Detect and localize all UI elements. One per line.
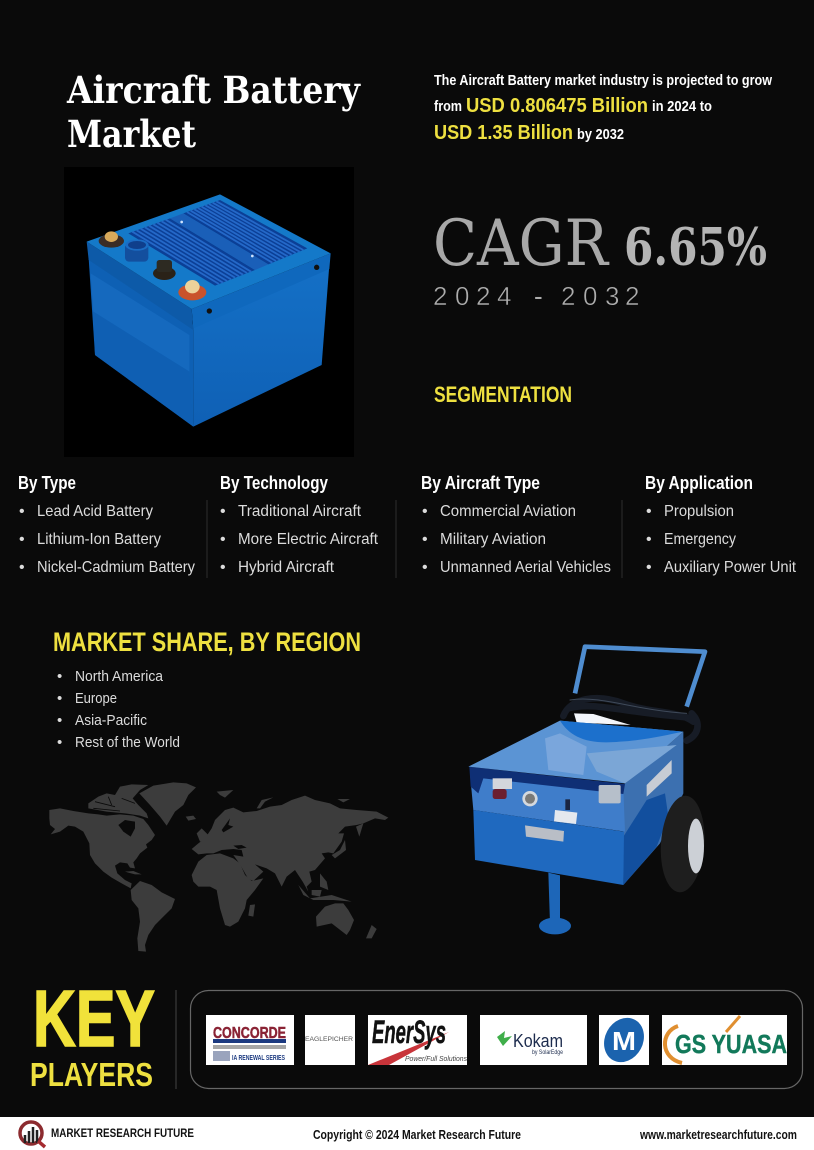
segment: by application: Emergency bbox=[664, 531, 736, 548]
CAGR figure: CAGR bbox=[433, 207, 610, 281]
segment: by aircraft type: Military Aviation bbox=[440, 531, 546, 548]
CAGR figure: - bbox=[534, 281, 543, 311]
footer bbox=[0, 1117, 814, 1150]
segment: by type: Lithium-Ion Battery bbox=[37, 531, 161, 548]
region list: • bbox=[57, 712, 62, 729]
CAGR figure: 2024 bbox=[433, 281, 511, 311]
cart stand bbox=[539, 873, 571, 934]
key players heading: PLAYERS bbox=[30, 1056, 153, 1093]
image: aircraft battery bbox=[64, 167, 354, 457]
market projection text: by 2032 bbox=[577, 126, 624, 143]
logo: m mark: M bbox=[612, 1026, 636, 1056]
region list: Asia-Pacific bbox=[75, 712, 147, 729]
segment: by aircraft type: • bbox=[422, 531, 428, 548]
cart right side bbox=[623, 732, 683, 885]
logo: concorde: CONCORDE bbox=[213, 1025, 286, 1042]
region list: • bbox=[57, 668, 62, 685]
map: europe, asia, africa, oceania bbox=[192, 790, 388, 938]
logo: gs yuasa bbox=[662, 1015, 787, 1065]
segment: by technology: Hybrid Aircraft bbox=[238, 559, 335, 576]
world map bbox=[49, 782, 388, 952]
logo: kokam: Kokam bbox=[513, 1031, 563, 1051]
logo: eaglepicher: EAGLEPICHER bbox=[305, 1037, 354, 1043]
segment: by technology: Traditional Aircraft bbox=[238, 503, 362, 520]
segment: by aircraft type: By Aircraft Type bbox=[421, 473, 540, 493]
key players frame bbox=[190, 990, 802, 1088]
market share heading: MARKET SHARE, BY REGION bbox=[53, 627, 361, 657]
cart handle bbox=[575, 647, 705, 707]
title: Market bbox=[67, 112, 196, 156]
battery right face bbox=[193, 265, 329, 427]
market projection text: from bbox=[434, 98, 462, 115]
logo: enersys: EnerSys bbox=[372, 1014, 446, 1050]
segment: by type: By Type bbox=[18, 473, 76, 493]
CAGR figure bbox=[433, 207, 767, 311]
logo: eaglepicher bbox=[305, 1015, 355, 1065]
CAGR figure: 6.65% bbox=[624, 218, 767, 278]
footer: MARKET RESEARCH FUTURE bbox=[51, 1126, 194, 1140]
logo: concorde bbox=[206, 1015, 294, 1065]
battery left face bbox=[89, 258, 193, 427]
segment: by application: Auxiliary Power Unit bbox=[664, 559, 797, 576]
segment: by technology: • bbox=[220, 531, 226, 548]
segment: by technology: More Electric Aircraft bbox=[238, 531, 379, 548]
segment: by application bbox=[645, 473, 797, 576]
cart front bbox=[470, 773, 625, 832]
region list: North America bbox=[75, 668, 164, 685]
logo: m mark bbox=[596, 1011, 652, 1069]
title bbox=[66, 68, 361, 156]
segment: by application: By Application bbox=[645, 473, 753, 493]
title: Aircraft Battery bbox=[66, 68, 361, 112]
footer: Copyright © 2024 Market Research Future bbox=[313, 1128, 521, 1142]
segment: by technology bbox=[220, 473, 379, 576]
logo: enersys: Power/Full Solutions bbox=[405, 1056, 467, 1063]
logo: kokam: by SolarEdge bbox=[532, 1050, 564, 1056]
segmentation heading: SEGMENTATION bbox=[434, 382, 572, 407]
cart cables bbox=[563, 698, 698, 741]
segment: by technology: • bbox=[220, 559, 226, 576]
region list: Europe bbox=[75, 690, 117, 707]
battery terminals bbox=[99, 234, 124, 248]
market projection text: in 2024 to bbox=[652, 98, 712, 115]
logo: enersys bbox=[368, 1014, 467, 1065]
segment: by type: Lead Acid Battery bbox=[37, 503, 153, 520]
region list: • bbox=[57, 690, 62, 707]
segment: by type: • bbox=[19, 559, 25, 576]
segment: by aircraft type: Commercial Aviation bbox=[440, 503, 576, 520]
segment: by aircraft type: • bbox=[422, 503, 428, 520]
segment: by type: • bbox=[19, 531, 25, 548]
segment: by type: • bbox=[19, 503, 25, 520]
cart wheel bbox=[658, 794, 708, 894]
battery lid lip bbox=[87, 242, 193, 330]
segment: by application: • bbox=[646, 503, 652, 520]
key players heading bbox=[30, 974, 155, 1093]
logo: concorde: IA RENEWAL SERIES bbox=[232, 1055, 285, 1062]
market projection text bbox=[434, 72, 772, 144]
region list: • bbox=[57, 734, 62, 751]
key players heading: KEY bbox=[33, 974, 155, 1063]
segment: by type: Nickel-Cadmium Battery bbox=[37, 559, 195, 576]
segment: by application: • bbox=[646, 559, 652, 576]
logo: kokam bbox=[480, 1015, 587, 1065]
segment: by application: • bbox=[646, 531, 652, 548]
segment: by aircraft type bbox=[421, 473, 611, 576]
cart lid bbox=[468, 721, 683, 783]
market projection text: USD 0.806475 Billion bbox=[466, 95, 648, 117]
cart controls bbox=[493, 778, 512, 789]
image: ground power cart bbox=[468, 647, 708, 934]
logo: gs yuasa: GS YUASA bbox=[675, 1029, 787, 1059]
battery top bbox=[87, 194, 331, 309]
footer logo icon bbox=[20, 1122, 45, 1147]
market projection text: USD 1.35 Billion bbox=[434, 122, 573, 144]
segment: by type bbox=[18, 473, 195, 576]
cart cable highlight bbox=[574, 713, 631, 725]
region list: Rest of the World bbox=[75, 734, 180, 751]
segment: by aircraft type: Unmanned Aerial Vehicles bbox=[440, 559, 611, 576]
segment: by application: Propulsion bbox=[664, 503, 734, 520]
CAGR figure: 2032 bbox=[561, 281, 639, 311]
segment: by technology: By Technology bbox=[220, 473, 328, 493]
region list bbox=[57, 668, 180, 751]
segment: by aircraft type: • bbox=[422, 559, 428, 576]
segment: by technology: • bbox=[220, 503, 226, 520]
map: americas bbox=[49, 782, 196, 952]
